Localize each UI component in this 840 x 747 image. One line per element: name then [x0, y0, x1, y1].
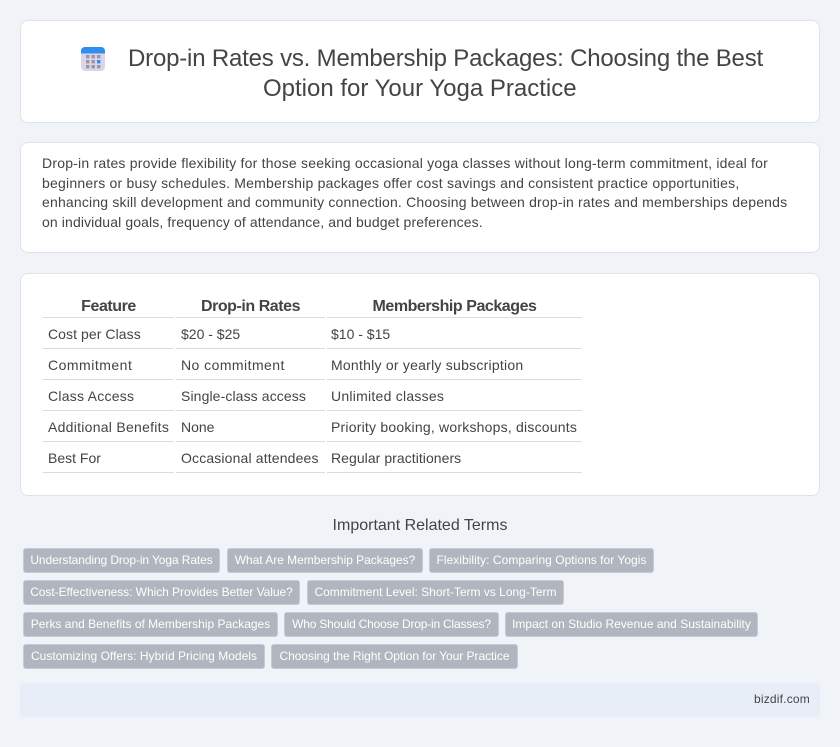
tag: Who Should Choose Drop-in Classes?: [292, 617, 491, 631]
tag: [23, 548, 220, 573]
related terms tags: [23, 548, 758, 669]
row: additional benefits: Priority booking, workshops, discounts: [331, 419, 577, 435]
tag: [505, 612, 758, 637]
tag: [227, 548, 423, 573]
summary text: Drop-in rates provide flexibility for those seeking occasional yoga classes without long-term commitment, ideal for: [42, 155, 768, 171]
row: best for: Regular practitioners: [331, 450, 461, 466]
row: best for: Occasional attendees: [181, 450, 319, 466]
row: class access: Unlimited classes: [331, 388, 444, 404]
row: additional benefits: [48, 419, 577, 435]
tag: Commitment Level: Short-Term vs Long-Term: [314, 585, 557, 599]
row: best for: Best For: [48, 450, 101, 466]
row: cost per class: Cost per Class: [48, 326, 141, 342]
tag: Flexibility: Comparing Options for Yogis: [437, 553, 646, 567]
table header: [81, 298, 536, 315]
table header: Membership Packages: [372, 298, 536, 315]
tag: [284, 612, 499, 637]
tag: Understanding Drop-in Yoga Rates: [30, 553, 213, 567]
tag: What Are Membership Packages?: [235, 553, 415, 567]
tag: [429, 548, 654, 573]
row: commitment: Monthly or yearly subscription: [331, 357, 523, 373]
panel: summary: [20, 142, 820, 253]
panel: comparison table: [20, 273, 820, 496]
summary text: on individual goals, frequency of attendance, and budget preferences.: [42, 214, 483, 230]
row: commitment: [48, 357, 523, 373]
row: cost per class: [48, 326, 390, 342]
tag: [307, 580, 564, 605]
table header: Drop-in Rates: [201, 298, 300, 315]
summary text: beginners or busy schedules. Membership packages offer cost savings and consistent practice opportunities,: [42, 175, 739, 191]
tag: Customizing Offers: Hybrid Pricing Models: [31, 649, 257, 663]
tag: Cost-Effectiveness: Which Provides Better Value?: [30, 585, 293, 599]
tag: [23, 644, 265, 669]
footer bar: [20, 683, 820, 717]
title: Option for Your Yoga Practice: [263, 75, 577, 102]
panel: title header: [20, 20, 820, 123]
row: commitment: Commitment: [48, 357, 132, 373]
icon: calendar: [81, 47, 105, 71]
tag: [271, 644, 518, 669]
row: class access: Class Access: [48, 388, 134, 404]
heading: related terms: Important Related Terms: [333, 517, 507, 534]
row: cost per class: $20 - $25: [181, 326, 240, 342]
row: commitment: No commitment: [181, 357, 285, 373]
row: additional benefits: None: [181, 419, 214, 435]
row: best for: [48, 450, 461, 466]
row: class access: [48, 388, 444, 404]
row: cost per class: $10 - $15: [331, 326, 390, 342]
table header: Feature: [81, 298, 136, 315]
row: class access: Single-class access: [181, 388, 306, 404]
tag: Impact on Studio Revenue and Sustainability: [512, 617, 751, 631]
title: [128, 45, 763, 102]
tag: Choosing the Right Option for Your Practice: [280, 649, 510, 663]
tag: Perks and Benefits of Membership Packages: [31, 617, 270, 631]
row: additional benefits: Additional Benefits: [48, 419, 169, 435]
title: Drop-in Rates vs. Membership Packages: Choosing the Best: [128, 45, 763, 72]
footer credit: bizdif.com: [754, 692, 810, 706]
tag: [23, 612, 278, 637]
tag: [23, 580, 300, 605]
summary text: [42, 155, 787, 230]
summary text: enhancing skill development and community connection. Choosing between drop-in rates and memberships depends: [42, 194, 787, 210]
